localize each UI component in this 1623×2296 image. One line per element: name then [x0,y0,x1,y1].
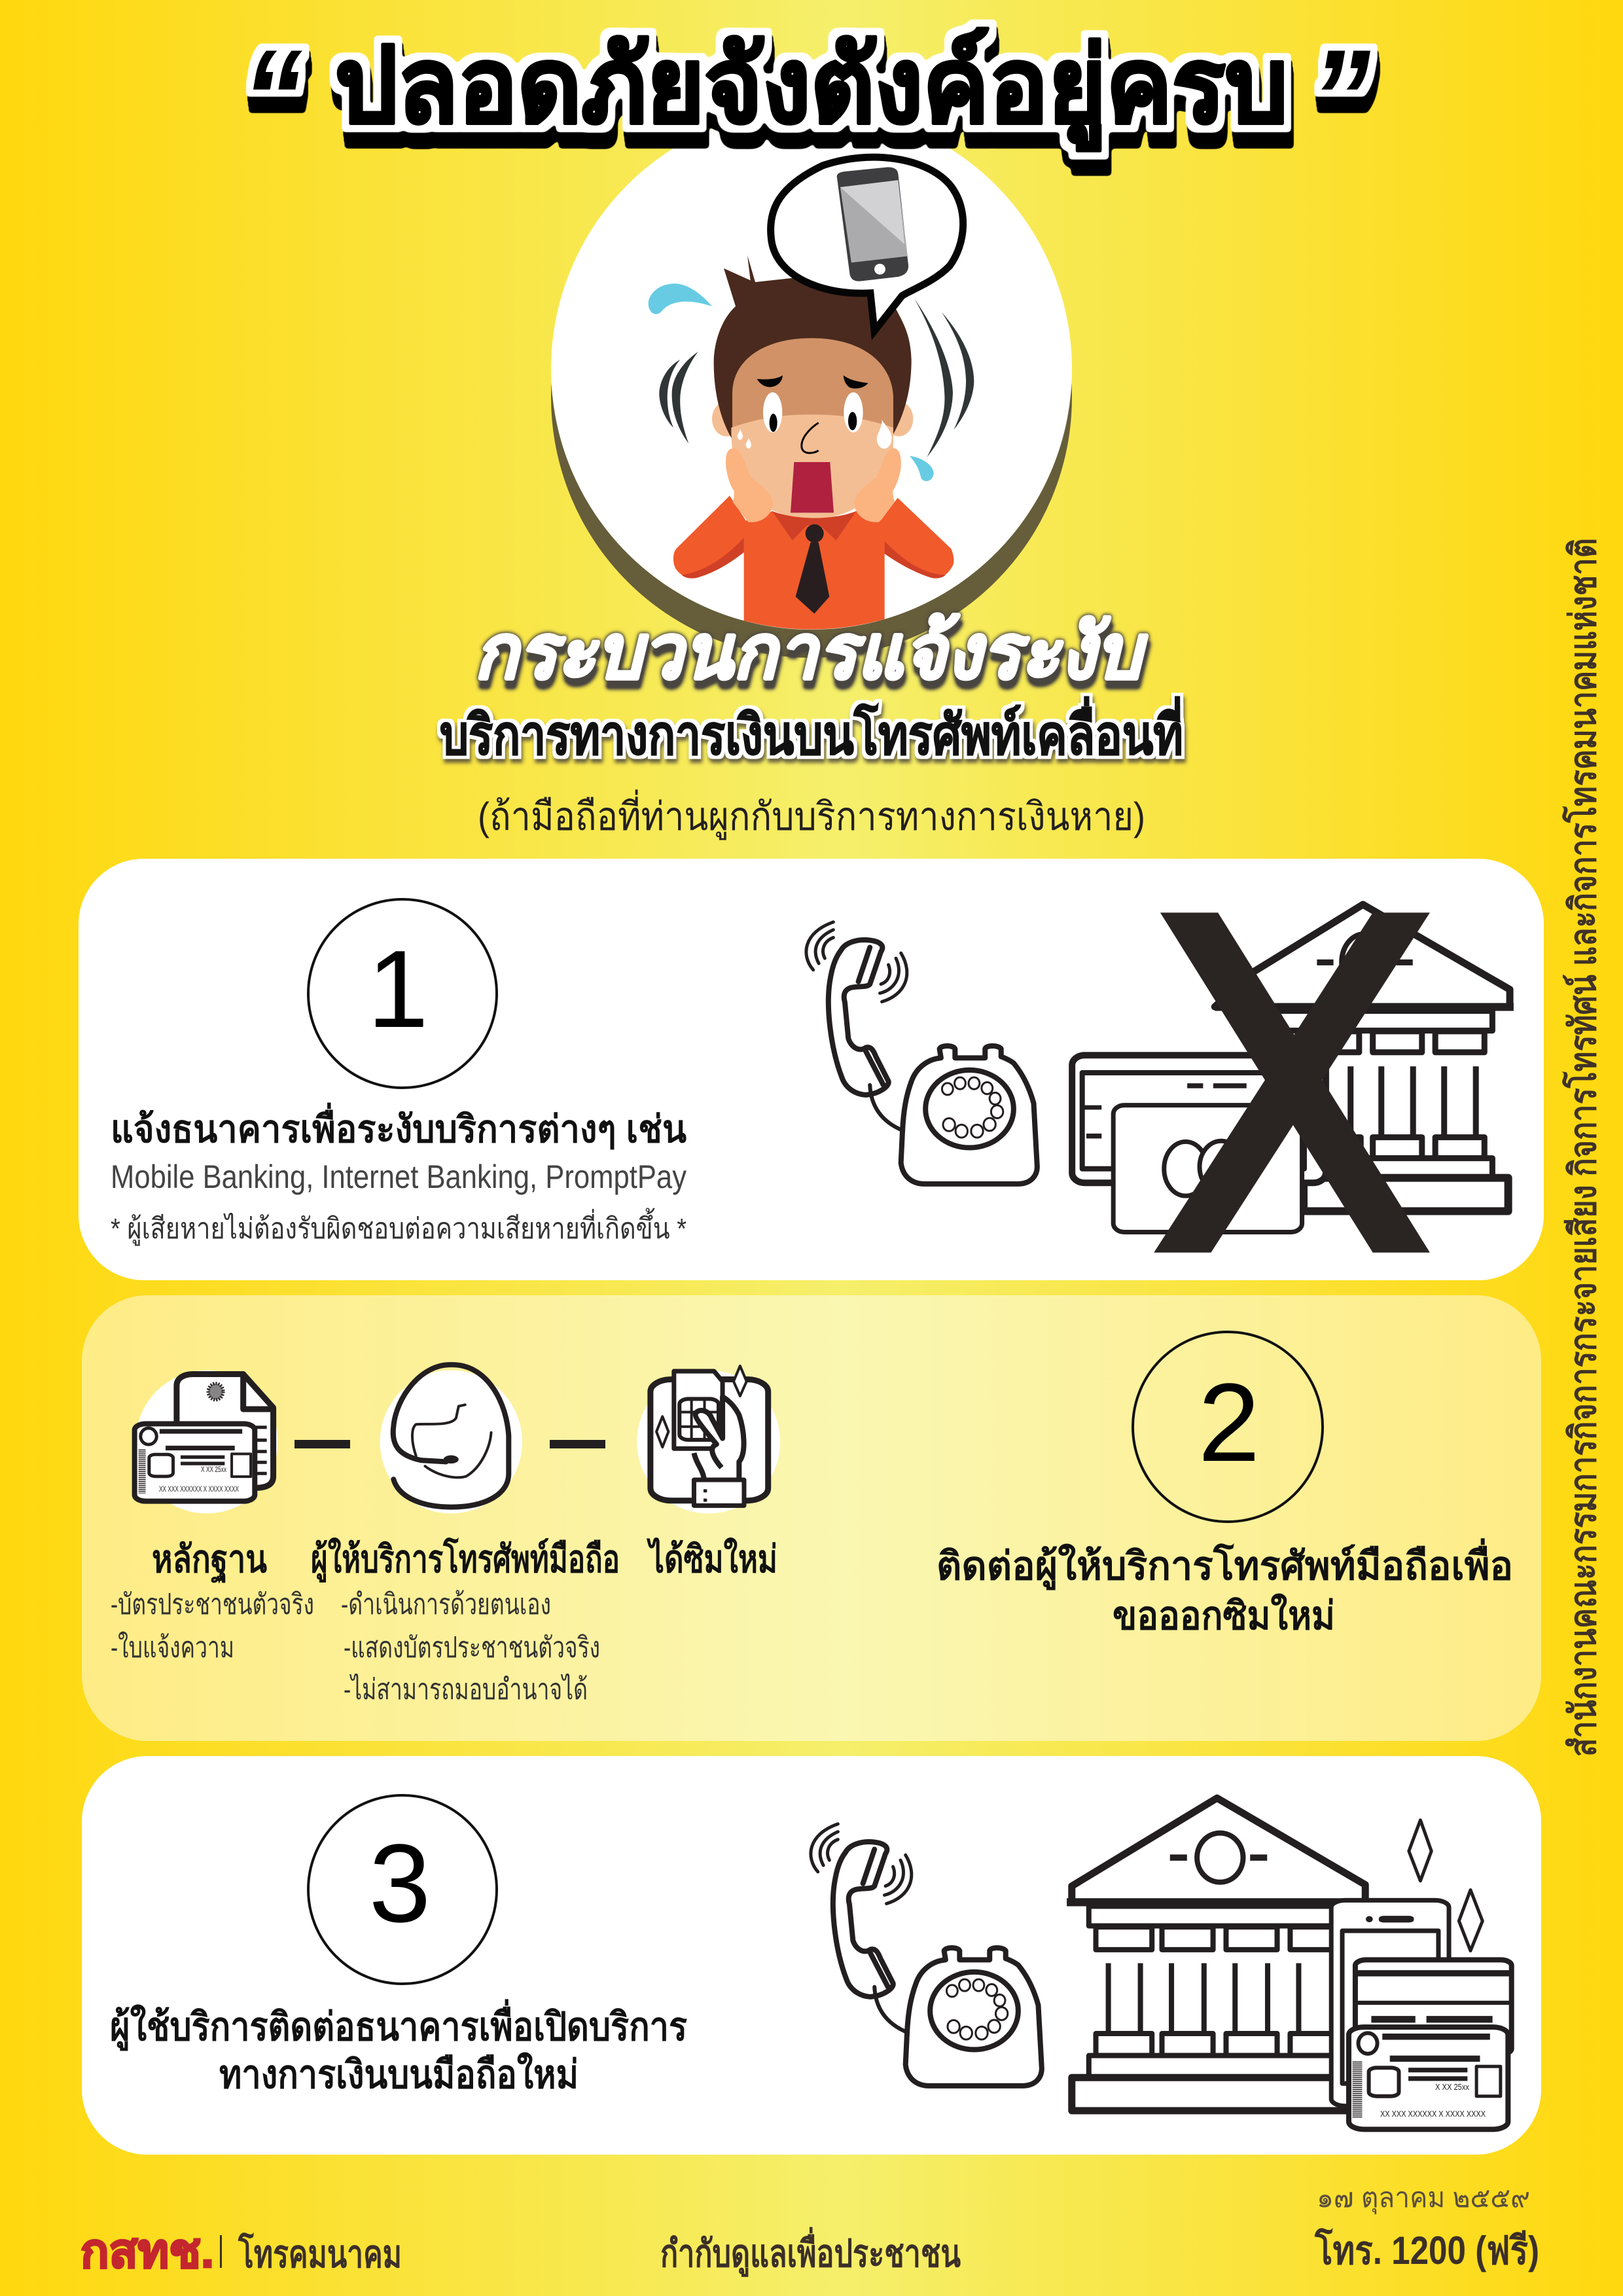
step number 1 [308,899,497,1088]
step 1 services: Mobile Banking, Internet Banking, PromptPay [111,1158,687,1195]
panel: step 1 [79,859,1544,1280]
list: evidence items: -บัตรประชาชนตัวจริง [111,1588,314,1621]
list: evidence items: -ใบแจ้งความ [111,1631,234,1664]
title: ” [1310,21,1370,175]
icon: hand holding SIM card [637,1366,780,1513]
date: ๑๗ ตุลาคม ๒๕๕๙ [1317,2182,1530,2215]
logo: NBTC and ministry: โทรคมนาคม [238,2231,402,2276]
subheading: (ถ้ามือถือที่ท่านผูกกับบริการทางการเงินหาย) [478,789,1145,840]
id card small print: X XX 25xx [1435,2082,1469,2092]
id card small print: X XX 25xx [201,1465,226,1474]
list: operator requirements: -แสดงบัตรประชาชนตัวจริง [344,1632,600,1664]
step number 2: 2 [1198,1361,1260,1485]
label: mobile operator: ผู้ให้บริการโทรศัพท์มือถือ [311,1536,620,1583]
step number 3: 3 [369,1821,431,1946]
step number 3 [308,1795,497,1984]
icon: operator with headset [380,1365,522,1513]
list: operator requirements: -ไม่สามารถมอบอำนาจได้ [344,1673,588,1706]
dash connector 1 [294,1440,350,1448]
step number 1: 1 [367,927,429,1050]
step 3 text: ทางการเงินบนมือถือใหม่ [219,2052,579,2096]
logo: NBTC and ministry [80,2225,402,2278]
hotline: โทร. 1200 (ฟรี) [1314,2227,1539,2272]
heading: process: กระบวนการแจ้งระงับ [474,609,1148,694]
icon: ringing telephone [811,1824,1042,2086]
id card small print [1380,2082,1486,2119]
step 2 text: ขอออกซิมใหม่ [1113,1593,1335,1638]
step 3 text: ผู้ใช้บริการติดต่อธนาคารเพื่อเปิดบริการ [110,1999,687,2051]
panel: step 3 [82,1756,1541,2155]
id card small print: XX XXX XXXXXX X XXXX XXXX [1380,2109,1486,2119]
id card small print [159,1465,239,1494]
label: new SIM: ได้ซิมใหม่ [646,1537,777,1581]
illustration: worried man in circle [551,109,1072,658]
logo: NBTC and ministry: กสทช. [80,2225,214,2278]
title: ปลอดภัยจังตังค์อยู่ครบ [335,27,1288,151]
step number 2 [1133,1332,1323,1522]
step 2 text: ติดต่อผู้ให้บริการโทรศัพท์มือถือเพื่อ [936,1538,1513,1590]
id card small print: XX XXX XXXXXX X XXXX XXXX [159,1484,239,1494]
panel: step 2 [82,1295,1541,1741]
vertical agency name: สำนักงานคณะกรรมการกิจการกระจายเสียง กิจการโทรทัศน์ และกิจการโทรคมนาคมแห่งชาติ [1561,538,1603,1757]
list: operator requirements: -ดำเนินการด้วยตนเอง [341,1588,551,1621]
step 3 text [110,1999,687,2096]
step 1 heading: แจ้งธนาคารเพื่อระงับบริการต่างๆ เช่น [111,1102,687,1151]
icon: crossed-out bank and cards [1072,905,1514,1253]
slogan: กำกับดูแลเพื่อประชาชน [660,2227,961,2277]
list: evidence items [111,1588,314,1664]
step 1 note: * ผู้เสียหายไม่ต้องรับผิดชอบต่อความเสียหายที่เกิดขึ้น * [111,1208,687,1246]
icon: ID card and document [135,1371,277,1513]
title: “ [242,21,302,175]
icon: ringing telephone [806,922,1037,1184]
heading: mobile banking service: บริการทางการเงินบนโทรศัพท์เคลื่อนที่ [440,696,1183,766]
dash connector 2 [550,1440,605,1448]
icon: bank with phone and cards [1067,1798,1512,2129]
list: operator requirements [341,1588,600,1706]
label: evidence: หลักฐาน [152,1538,267,1584]
step 2 text [936,1538,1513,1638]
title [242,21,1370,175]
